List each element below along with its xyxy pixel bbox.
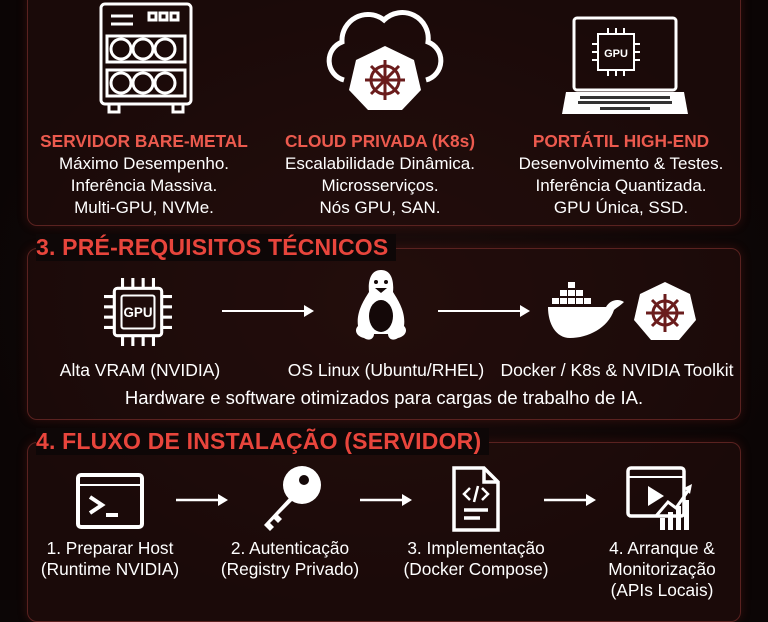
text: cloud: Escalabilidade Dinâmica. — [285, 154, 475, 173]
icon: laptop gpu: GPU — [604, 48, 628, 60]
icon: code document — [452, 466, 500, 532]
arrow — [222, 305, 314, 317]
panel: installation flow — [27, 442, 741, 622]
text: bare-metal — [40, 131, 248, 217]
text: step 1 — [41, 538, 179, 579]
text: step 4: Monitorização — [608, 559, 716, 579]
icon: kubernetes — [634, 282, 696, 340]
icon: laptop gpu — [562, 16, 688, 114]
icon: gpu chip: GPU — [124, 305, 152, 320]
text: bare-metal: Inferência Massiva. — [71, 176, 217, 195]
text: step 4 — [608, 538, 716, 600]
text: laptop: Inferência Quantizada. — [535, 176, 707, 195]
text: laptop: PORTÁTIL HIGH-END — [533, 131, 709, 151]
text: cloud: CLOUD PRIVADA (K8s) — [285, 131, 475, 151]
icon: cloud kubernetes — [326, 10, 444, 110]
text: docker: Docker / K8s & NVIDIA Toolkit — [500, 360, 734, 380]
text: laptop: Desenvolvimento & Testes. — [519, 154, 723, 173]
panel: prerequisites — [27, 248, 741, 420]
text: bare-metal: Multi-GPU, NVMe. — [74, 198, 214, 217]
text: step 4: (APIs Locais) — [611, 580, 713, 600]
arrow — [438, 305, 530, 317]
arrow — [176, 494, 228, 506]
text: linux: OS Linux (Ubuntu/RHEL) — [288, 360, 484, 380]
text: cloud — [285, 131, 475, 217]
icon: monitoring — [626, 466, 692, 530]
arrow — [360, 494, 412, 506]
text: step 1: (Runtime NVIDIA) — [41, 559, 179, 579]
icon: linux penguin — [356, 270, 406, 340]
text: bare-metal: SERVIDOR BARE-METAL — [40, 131, 248, 151]
icon: terminal — [76, 473, 144, 529]
text: laptop — [519, 131, 723, 217]
text: cloud: Microsserviços. — [321, 176, 439, 195]
panel: deployment options — [27, 0, 741, 226]
arrow — [544, 494, 596, 506]
text: step 1: 1. Preparar Host — [47, 538, 173, 558]
icon: docker whale — [548, 282, 624, 338]
text: step 3: 3. Implementação — [407, 538, 545, 558]
text: step 3 — [403, 538, 548, 579]
text: step 4: 4. Arranque & — [609, 538, 715, 558]
icon: bare-metal server — [100, 2, 192, 114]
text: bare-metal: Máximo Desempenho. — [59, 154, 229, 173]
text: summary: Hardware e software otimizados para cargas de trabalho de IA. — [125, 387, 643, 408]
text: step 2 — [221, 538, 359, 579]
text: cloud: Nós GPU, SAN. — [320, 198, 440, 217]
text: VRAM: Alta VRAM (NVIDIA) — [60, 360, 220, 380]
heading: prerequisites: 3. PRÉ-REQUISITOS TÉCNICOS — [36, 234, 388, 260]
icon: gpu chip — [104, 278, 172, 346]
heading: installation: 4. FLUXO DE INSTALAÇÃO (SERVIDOR) — [36, 428, 481, 454]
text: laptop: GPU Única, SSD. — [554, 198, 688, 217]
text: step 2: (Registry Privado) — [221, 559, 359, 579]
icon: key — [264, 466, 321, 531]
text: step 3: (Docker Compose) — [403, 559, 548, 579]
text: step 2: 2. Autenticação — [231, 538, 349, 558]
